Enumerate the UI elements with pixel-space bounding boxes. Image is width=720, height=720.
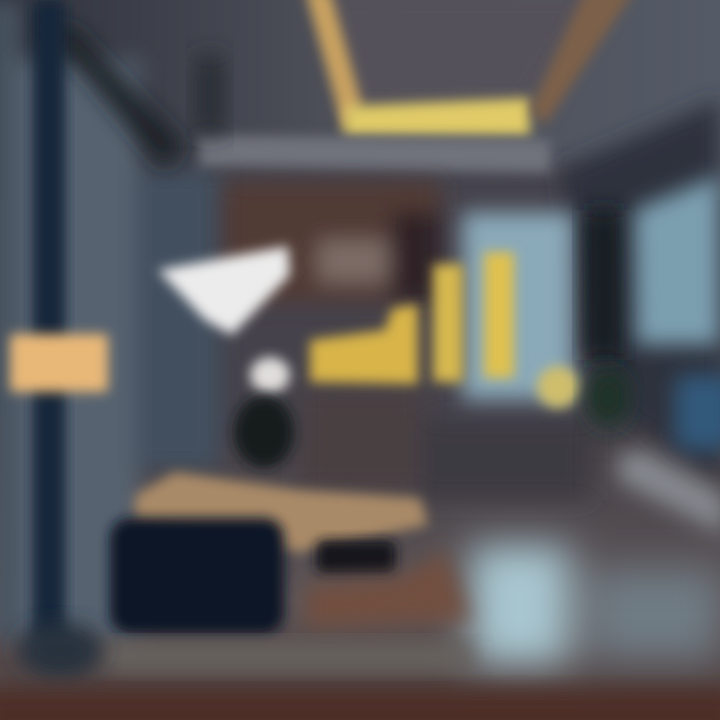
- golden cove left: [305, 0, 362, 135]
- left wall: [0, 0, 220, 640]
- ceiling background: [0, 0, 720, 200]
- green plant, left: [234, 396, 294, 468]
- blue armchair: [675, 375, 720, 450]
- floor background: [0, 420, 720, 720]
- yellow blocks: [310, 252, 514, 384]
- tray inner panel: [320, 0, 610, 110]
- glowing wall lamp: [10, 334, 108, 392]
- floor reflection: [470, 545, 720, 665]
- ceiling beam: [198, 135, 550, 172]
- dark column base: [18, 622, 102, 678]
- wood floor strip: [0, 690, 720, 720]
- golden cove bottom: [345, 98, 530, 136]
- pale blue panels: [462, 212, 574, 400]
- white low bench: [615, 448, 720, 535]
- dark cushion: [316, 540, 396, 574]
- dark pendant stem: [195, 55, 225, 135]
- dark window pillar: [584, 210, 624, 360]
- copper cove right: [530, 0, 635, 125]
- dark diagonal beam: [40, 20, 185, 170]
- dark blue column: [33, 0, 65, 640]
- brown ottoman: [305, 550, 470, 628]
- brown shelving: [225, 182, 590, 500]
- back wall: [130, 170, 630, 440]
- ceiling tray with golden light: [305, 0, 635, 136]
- pale rug edge: [100, 642, 470, 672]
- right window: [634, 175, 720, 345]
- white pendant lamp: [158, 246, 290, 335]
- small yellow light: [537, 366, 579, 408]
- green plant, right: [586, 368, 630, 428]
- right wall: [560, 100, 720, 480]
- navy sofa body: [110, 518, 284, 634]
- sofa: [110, 472, 470, 634]
- white globe: [250, 357, 290, 393]
- tan cushions: [135, 472, 428, 552]
